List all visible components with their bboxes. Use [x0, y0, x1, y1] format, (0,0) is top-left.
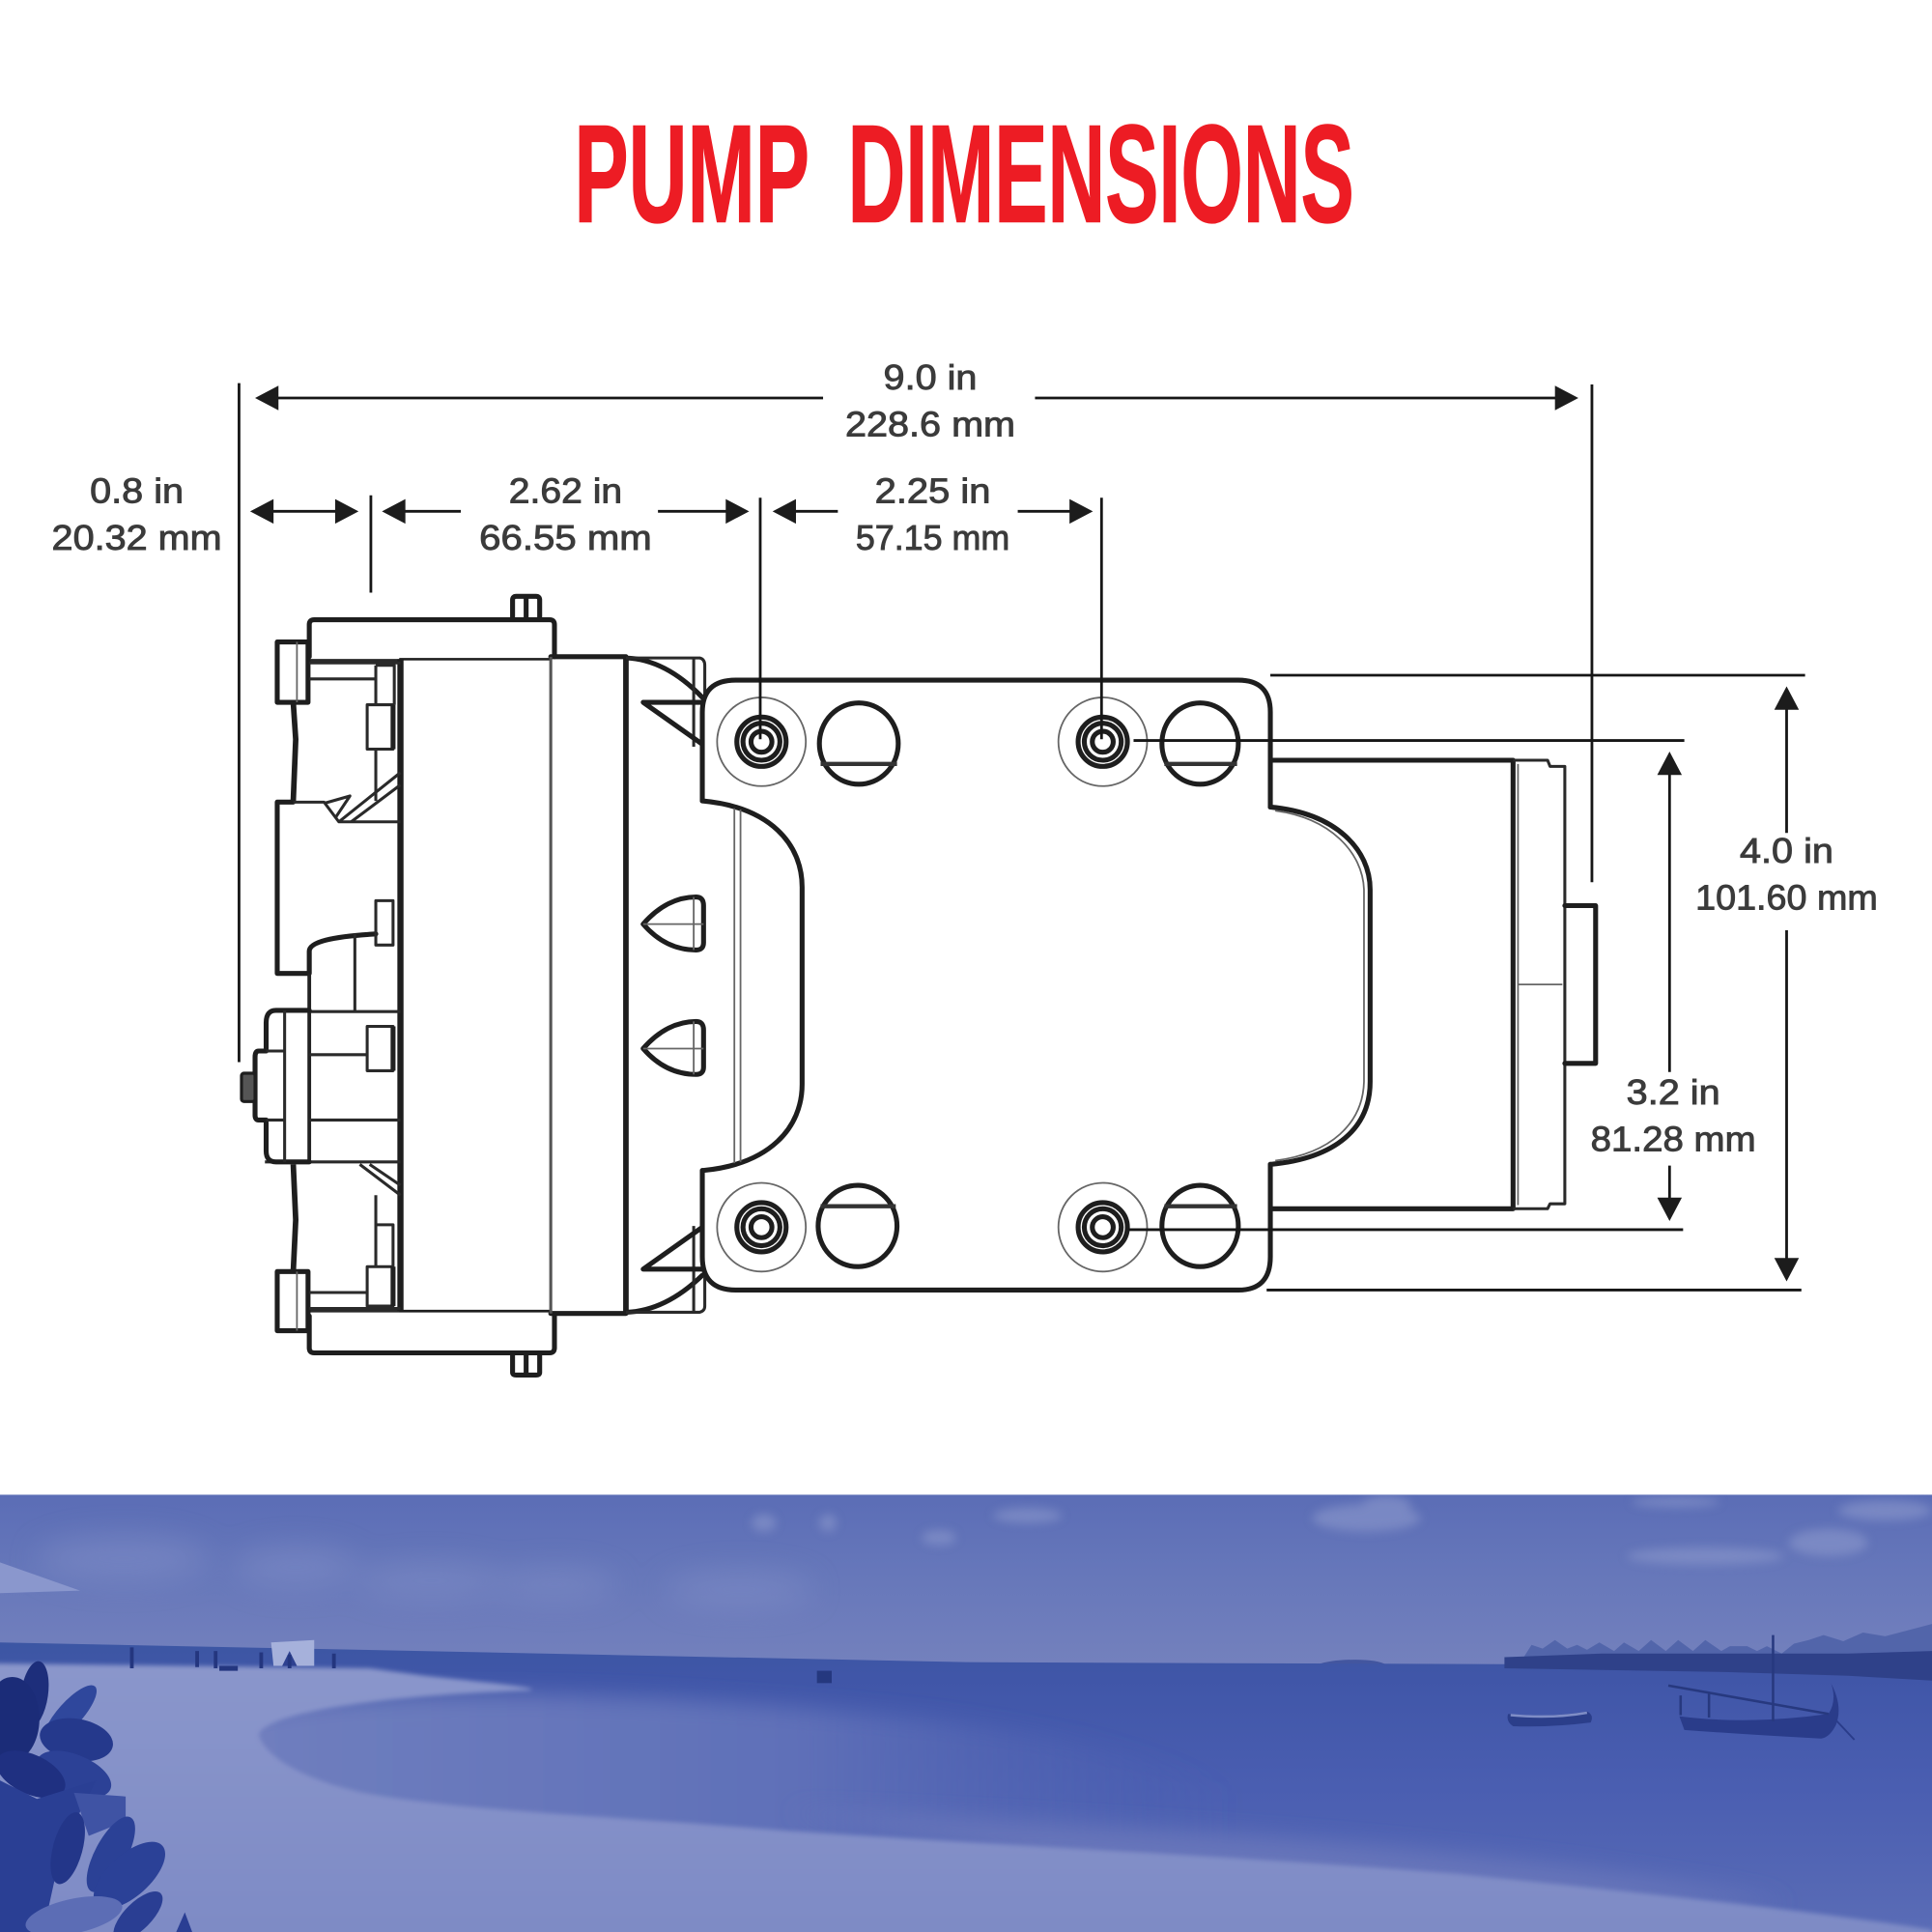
pump technical drawing [242, 596, 1596, 1375]
label: 2.62 in: 2.62 in [509, 471, 622, 510]
label: 2.62 in: 66.55 mm [479, 519, 652, 557]
title [574, 97, 1354, 252]
dimension: 3.2 in arrow [1658, 752, 1682, 1221]
mounting plate [702, 680, 1370, 1290]
lagoon shallows [222, 1694, 1355, 1873]
dimension: 0.8 in arrow [250, 499, 358, 524]
dimension: 4.0 in arrow [1775, 686, 1799, 1282]
mounting hole bottom left [717, 1182, 806, 1271]
plate arcs [702, 801, 1370, 1171]
label: overall length: 9.0 in [884, 358, 977, 397]
label: 2.25 in: 57.15 mm [856, 519, 1009, 557]
sand [0, 1663, 1932, 1932]
mounting hole top right [1059, 697, 1148, 786]
sea [0, 1642, 1932, 1932]
dimension: 2.62 in arrows [382, 499, 750, 524]
label: 4.0 in: 101.60 mm [1695, 878, 1878, 917]
near-shore shallows [788, 1811, 1786, 1904]
umbrella [0, 1562, 80, 1593]
label: 3.2 in [1591, 1073, 1756, 1158]
pump head housing [309, 596, 626, 1375]
overwater villas [1504, 1624, 1932, 1681]
sky [0, 1494, 1932, 1667]
title: PUMP [574, 97, 810, 252]
dimension lines [239, 384, 1805, 1290]
mounting hole bottom right [1059, 1182, 1148, 1271]
dimension: overall length arrow [255, 385, 1578, 411]
title: DIMENSIONS [848, 97, 1354, 252]
distant boat [817, 1671, 832, 1683]
label: overall length: 228.6 mm [845, 406, 1015, 444]
label: 4.0 in: 4.0 in [1740, 832, 1833, 870]
dhoni sailing boat [1668, 1635, 1855, 1740]
label: 2.62 in [479, 471, 652, 557]
label: 4.0 in [1695, 832, 1878, 917]
label: 2.25 in: 2.25 in [875, 471, 991, 510]
foliage [0, 1660, 192, 1932]
mounting hole top left [717, 697, 806, 786]
label: 3.2 in: 81.28 mm [1591, 1120, 1756, 1158]
inflatable boat [1508, 1712, 1592, 1726]
label: 0.8 in [52, 471, 222, 557]
dimension: 2.25 in arrows [773, 499, 1093, 524]
plate outline [702, 680, 1270, 1290]
clouds [37, 1495, 1932, 1606]
label: 0.8 in: 0.8 in [90, 471, 184, 510]
island [1318, 1660, 1386, 1664]
plate inner detail [734, 809, 1364, 1163]
beach figures and canopy [131, 1640, 334, 1671]
left ports and fittings [242, 642, 401, 1331]
motor body [1270, 760, 1596, 1208]
beach photo band [0, 1494, 1932, 1932]
label: overall length [845, 358, 1015, 444]
front ribbed collar [626, 658, 705, 1312]
label: 0.8 in: 20.32 mm [52, 519, 222, 557]
label: 3.2 in: 3.2 in [1627, 1073, 1720, 1112]
label: 2.25 in [856, 471, 1009, 557]
plate slots [818, 703, 1238, 1266]
